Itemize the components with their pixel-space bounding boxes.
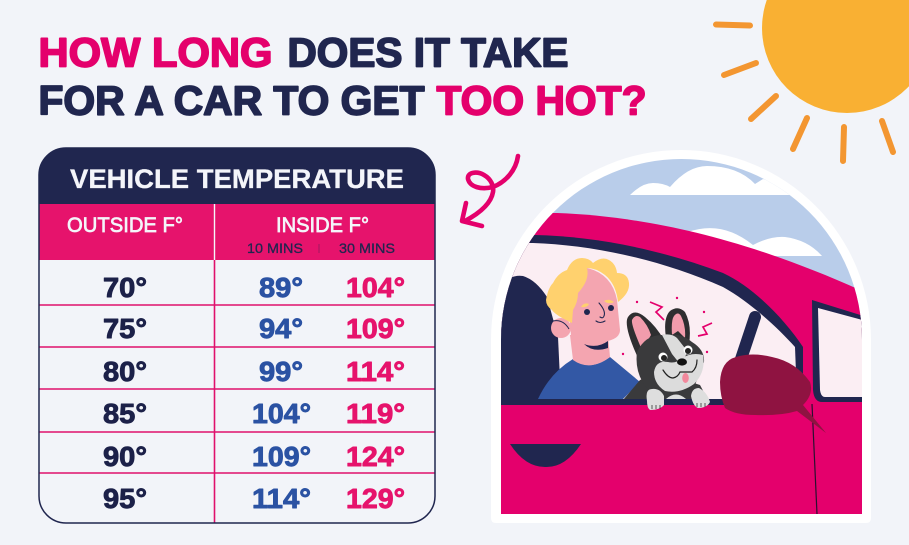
icon: sun — [716, 0, 909, 161]
dots around dog — [622, 297, 708, 355]
cloud: lower — [688, 228, 822, 256]
dog: inner ears — [632, 314, 685, 350]
title — [38, 30, 646, 124]
column header: inside: INSIDE F° — [276, 214, 369, 237]
panel: vehicle temperature table — [39, 148, 435, 523]
table values: outside: 95° — [103, 483, 147, 514]
man: face — [581, 300, 614, 350]
title: TOO HOT? — [436, 78, 646, 124]
dog — [624, 308, 710, 410]
dog: ears — [627, 308, 690, 358]
seat belt post — [740, 317, 755, 362]
zigzag lines around dog — [650, 302, 712, 336]
table values: outside: 75° — [103, 313, 147, 344]
illustration: white arch frame — [491, 150, 871, 523]
side mirror — [720, 354, 826, 433]
table values: inside after 30 mins — [346, 272, 405, 514]
car body — [480, 213, 870, 520]
dog: head — [636, 334, 704, 384]
dog: blaze — [662, 334, 686, 361]
table values: inside after 10 mins: 99° — [259, 356, 303, 387]
dog: paws — [647, 388, 710, 410]
cloud: upper — [630, 166, 792, 195]
dog: muzzle — [654, 354, 704, 392]
sub-header: minutes: 30 MINS — [339, 240, 395, 256]
illustration: man and dog in car — [501, 159, 862, 514]
window frame — [501, 235, 803, 374]
door handle — [510, 444, 581, 467]
man: ear line — [553, 321, 569, 329]
table values: inside after 10 mins: 104° — [252, 398, 311, 429]
man: shirt — [538, 357, 640, 399]
window bottom trim — [623, 399, 692, 400]
sub-header: minutes — [247, 240, 395, 256]
table values: inside after 10 mins: 114° — [252, 483, 311, 514]
table values: inside after 30 mins: 114° — [346, 356, 405, 387]
dog: body — [624, 380, 704, 399]
door seam — [812, 404, 817, 514]
rear window — [812, 300, 862, 402]
table values: outside — [103, 272, 147, 514]
table values: inside after 10 mins — [252, 272, 311, 514]
table values: inside after 30 mins: 104° — [346, 272, 405, 303]
column header: outside: OUTSIDE F° — [67, 214, 183, 237]
arrow: curly arrow pointing to table — [462, 156, 518, 226]
title: FOR A CAR TO GET — [38, 78, 424, 124]
sub-header: minutes: 10 MINS — [247, 240, 303, 256]
table values: outside: 90° — [103, 441, 147, 472]
dog: nose — [677, 358, 687, 366]
man: hair — [546, 258, 629, 323]
table values: inside after 10 mins: 94° — [259, 313, 303, 344]
dog: tongue — [682, 373, 689, 383]
table heading: VEHICLE TEMPERATURE — [70, 164, 404, 194]
man: neck, head and ear — [551, 268, 620, 365]
dog: toes — [652, 403, 705, 409]
table values: inside after 30 mins: 124° — [346, 441, 405, 472]
table values: inside after 30 mins: 119° — [346, 398, 405, 429]
table values: inside after 30 mins: 109° — [346, 313, 405, 344]
window glass — [480, 243, 797, 399]
table values: outside: 80° — [103, 356, 147, 387]
table values: inside after 30 mins: 129° — [346, 483, 405, 514]
sky — [530, 159, 861, 318]
car seat — [501, 276, 561, 400]
table values: inside after 10 mins: 109° — [252, 441, 311, 472]
table values: outside: 85° — [103, 398, 147, 429]
dog: eyes — [658, 346, 692, 362]
table values: inside after 10 mins: 89° — [259, 272, 303, 303]
title: HOW LONG — [38, 30, 272, 76]
table values: outside: 70° — [103, 272, 147, 303]
title: DOES IT TAKE — [288, 30, 568, 76]
dog: mouth — [663, 360, 697, 378]
